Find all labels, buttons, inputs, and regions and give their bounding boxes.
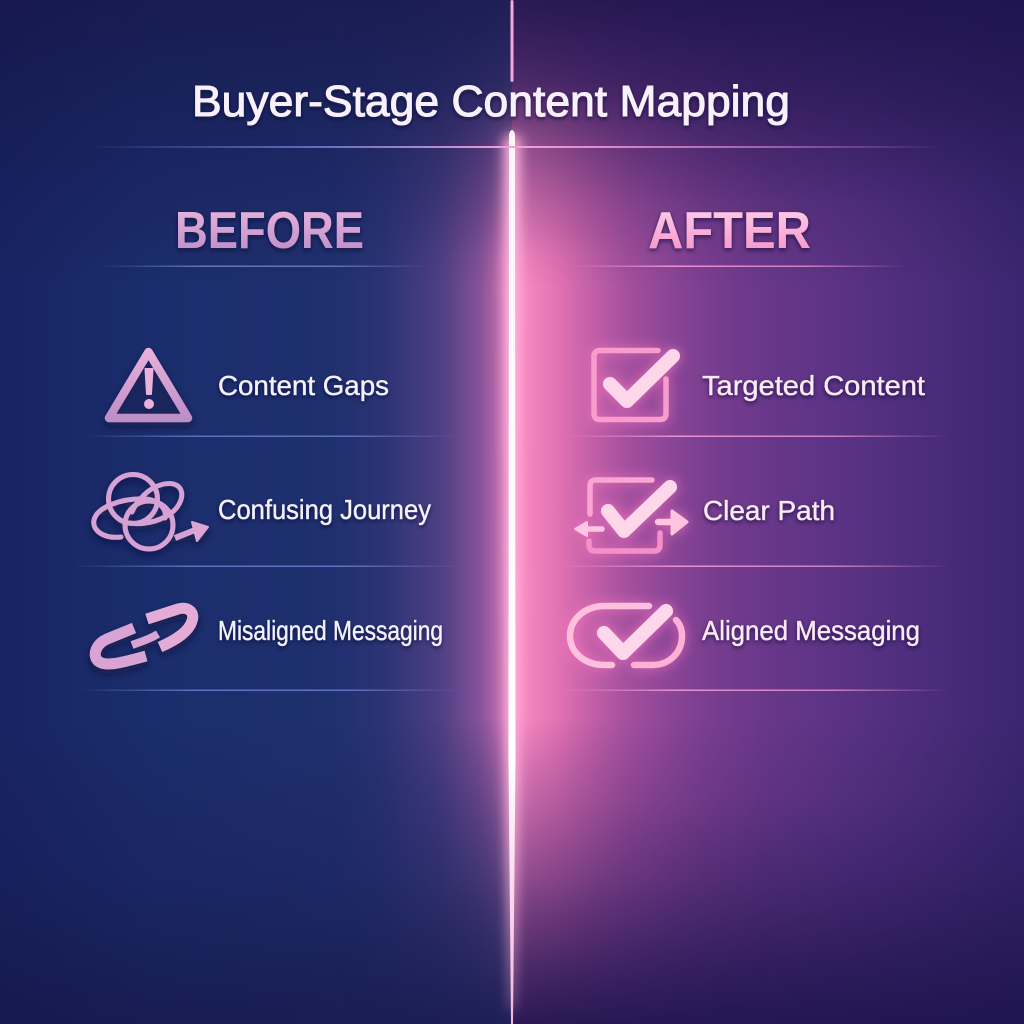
- row: aligned messaging: [570, 606, 920, 665]
- panel: after: [555, 202, 950, 691]
- icon: tangled loops with arrow: [94, 474, 208, 549]
- label: aligned messaging: Aligned Messaging: [702, 615, 920, 646]
- icon: check with path arrows: [575, 480, 687, 551]
- row: targeted content: [594, 350, 925, 420]
- title divider line: [85, 146, 945, 148]
- row: content gaps: [109, 352, 389, 418]
- label: content gaps: Content Gaps: [218, 370, 389, 401]
- label: targeted content: Targeted Content: [702, 370, 925, 401]
- row: confusing journey: [94, 474, 431, 549]
- panel: before: [72, 202, 464, 691]
- glowing center divider: [504, 0, 520, 1024]
- label: misaligned messaging: Misaligned Messaging: [218, 615, 443, 646]
- row: misaligned messaging: [95, 608, 443, 664]
- title: Buyer-Stage Content Mapping: [192, 77, 790, 126]
- icon: broken chain link: [95, 608, 193, 664]
- before heading: BEFORE: [175, 202, 364, 260]
- icon: warning triangle: [109, 352, 188, 418]
- label: confusing journey: Confusing Journey: [218, 494, 431, 525]
- label: clear path: Clear Path: [703, 495, 835, 526]
- row: clear path: [575, 480, 835, 551]
- after heading: AFTER: [648, 202, 811, 260]
- icon: checked box: [594, 350, 673, 420]
- icon: check in rounded capsule: [570, 606, 682, 665]
